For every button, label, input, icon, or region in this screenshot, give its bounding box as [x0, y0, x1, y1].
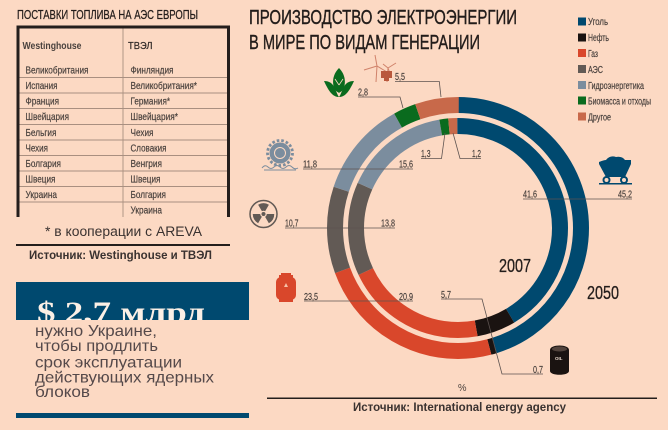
chart value labels: 41,6	[523, 188, 537, 200]
icon: radiation symbol	[250, 200, 277, 228]
callout text: блоков	[35, 384, 90, 401]
chart value labels: 0,7	[533, 364, 543, 376]
icon: hydro water wheel	[262, 140, 298, 170]
legend: Уголь	[588, 17, 608, 28]
chart: outer ring 2050	[335, 105, 581, 351]
chart: inner ring 2007	[356, 126, 560, 330]
legend: Другое	[588, 112, 611, 124]
table column: TVEL: Словакия	[130, 142, 166, 154]
unit label: %	[458, 382, 466, 394]
year label 2007: 2007	[499, 255, 531, 276]
table column: TVEL: Финляндия	[130, 64, 174, 76]
icon: coal cart	[599, 156, 632, 184]
table column: TVEL: Швеция	[130, 174, 160, 186]
chart value labels	[285, 71, 632, 376]
table column: Westinghouse: Швейцария	[26, 111, 69, 123]
table column: TVEL: Болгария	[130, 189, 166, 201]
icon: wind turbines and solar panel	[364, 55, 396, 82]
icon: biomass leaf	[324, 68, 354, 97]
footnote: * в кооперации с AREVA	[45, 224, 202, 239]
table column: Westinghouse: Болгария	[26, 158, 61, 170]
table column: TVEL: Украина	[130, 204, 162, 216]
legend: Газ	[588, 49, 598, 60]
chart value labels: 20,9	[399, 291, 413, 303]
panel: fuel supply table	[18, 27, 228, 217]
chart leader lines	[285, 82, 632, 374]
table column: TVEL	[128, 40, 197, 216]
heading: fuel supply table: ПОСТАВКИ ТОПЛИВА НА АЭС ЕВРОПЫ	[17, 8, 198, 22]
callout text: чтобы продлить	[35, 338, 158, 355]
chart value labels: 15,6	[399, 158, 413, 170]
table column: TVEL: Венгрия	[130, 158, 162, 170]
chart value labels: 10,7	[285, 218, 299, 230]
table column: TVEL: Чехия	[130, 127, 154, 139]
chart value labels: 13,8	[381, 218, 395, 230]
chart value labels: 45,2	[618, 188, 632, 200]
table column: TVEL: Великобритания*	[130, 80, 197, 92]
callout figure: $ 2,7 млрд	[37, 296, 205, 329]
chart value labels: 5,7	[441, 289, 451, 301]
legend: Нефть	[588, 32, 609, 44]
callout text: действующих ядерных	[35, 370, 214, 386]
table column: TVEL: ТВЭЛ	[128, 40, 153, 52]
chart value labels: 11,8	[303, 158, 317, 170]
title: В МИРЕ ПО ВИДАМ ГЕНЕРАЦИИ	[249, 32, 480, 54]
callout text	[35, 323, 214, 401]
table column: TVEL: Германия*	[130, 96, 170, 108]
table column: Westinghouse: Франция	[26, 96, 59, 108]
chart value labels: 5,5	[395, 71, 405, 83]
icon: oil barrel: OIL	[555, 356, 563, 361]
legend: АЭС	[588, 65, 603, 76]
legend: Гидроэнергетика	[588, 81, 644, 92]
table column: Westinghouse: Westinghouse	[22, 40, 82, 52]
table column: TVEL: Швейцария*	[130, 111, 178, 123]
table column: Westinghouse: Швеция	[26, 174, 56, 186]
chart value labels: 1,2	[472, 148, 481, 160]
legend	[578, 17, 651, 124]
source: fuel table: Источник: Westinghouse и ТВЭЛ	[29, 250, 212, 262]
icon: oil barrel	[550, 346, 569, 375]
table column: Westinghouse: Великобритания	[26, 64, 88, 76]
table column: Westinghouse	[22, 40, 88, 201]
icon: gas cylinder	[276, 273, 296, 302]
table column: Westinghouse: Бельгия	[26, 127, 56, 139]
callout text: нужно Украине,	[35, 323, 157, 340]
chart value labels: 1,3	[421, 148, 431, 160]
title	[249, 7, 517, 54]
callout text: срок эксплуатации	[35, 354, 182, 372]
chart value labels: 2,8	[358, 86, 368, 98]
source: chart: Источник: International energy agency	[353, 402, 567, 414]
table column: Westinghouse: Украина	[26, 189, 57, 201]
chart value labels: 23,5	[304, 291, 318, 303]
year label 2050: 2050	[587, 282, 619, 303]
title: ПРОИЗВОДСТВО ЭЛЕКТРОЭНЕРГИИ	[249, 7, 517, 29]
panel: cost callout	[16, 282, 249, 418]
table column: Westinghouse: Испания	[26, 80, 58, 92]
table column: Westinghouse: Чехия	[26, 142, 48, 154]
